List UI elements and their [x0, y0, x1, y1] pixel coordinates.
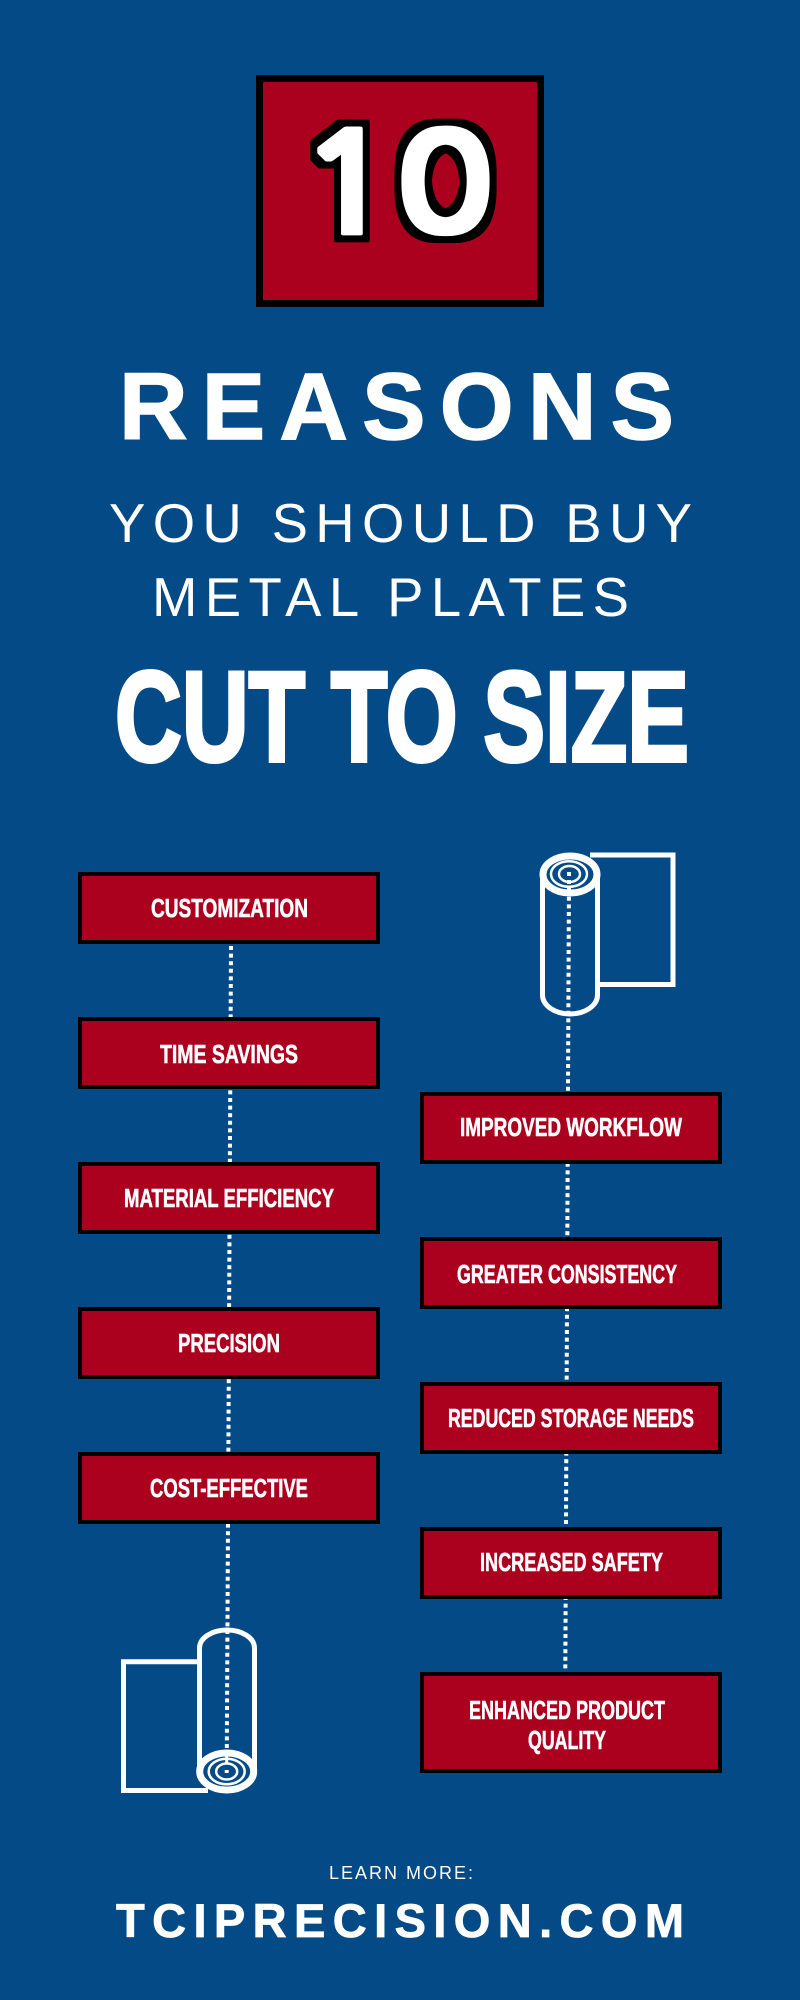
- panel: reduced storage needs: REDUCED STORAGE NEEDS: [448, 1403, 694, 1433]
- icon: top metal roll: [542, 855, 673, 1014]
- panel: enhanced product quality: [422, 1674, 720, 1771]
- panel: improved workflow: IMPROVED WORKFLOW: [460, 1112, 682, 1142]
- panel: greater consistency: [422, 1239, 720, 1307]
- footer: website: TCIPRECISION.COM: [116, 1894, 684, 1947]
- panel: precision: PRECISION: [178, 1328, 280, 1358]
- panel: greater consistency: GREATER CONSISTENCY: [457, 1259, 677, 1289]
- heading: reasons: REASONS: [119, 354, 674, 460]
- panel: enhanced product quality: ENHANCED PRODUCT: [469, 1695, 665, 1725]
- number badge: [260, 78, 540, 304]
- panel: time savings: TIME SAVINGS: [160, 1039, 298, 1069]
- panel: increased safety: [422, 1529, 720, 1597]
- number badge: 1: [298, 117, 398, 254]
- icon: bottom metal roll: [124, 1630, 254, 1790]
- panel: customization: [80, 874, 378, 942]
- connector: left dotted line: [227, 946, 231, 1772]
- panel: cost-effective: [80, 1454, 378, 1522]
- panel: time savings: [80, 1019, 378, 1087]
- panel: material efficiency: [80, 1164, 378, 1232]
- panel: customization: CUSTOMIZATION: [151, 893, 308, 923]
- panel: cost-effective: COST-EFFECTIVE: [150, 1473, 308, 1503]
- heading: metal plates: METAL PLATES: [152, 567, 629, 628]
- panel: precision: [80, 1309, 378, 1377]
- number badge: 0: [394, 117, 496, 254]
- panel: improved workflow: [422, 1094, 720, 1162]
- panel: material efficiency: MATERIAL EFFICIENCY: [124, 1183, 334, 1213]
- footer: learn more: LEARN MORE:: [329, 1863, 473, 1883]
- heading: you should buy: YOU SHOULD BUY: [109, 493, 692, 554]
- panel: enhanced product quality: QUALITY: [528, 1725, 606, 1755]
- panel: reduced storage needs: [422, 1384, 720, 1452]
- connector: right dotted line: [565, 874, 569, 1672]
- panel: increased safety: INCREASED SAFETY: [480, 1547, 663, 1577]
